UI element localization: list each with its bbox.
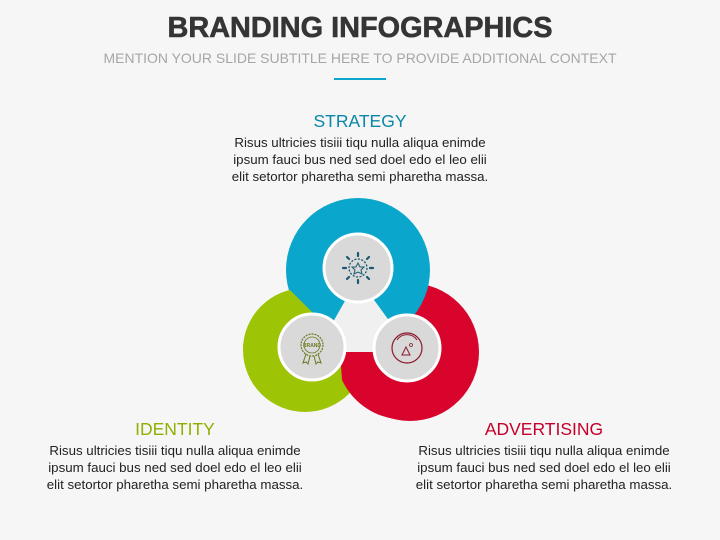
text: strategy: elit setortor pharetha semi pharetha massa. [232,169,488,184]
icon: strategy [324,234,392,302]
text: identity: Risus ultricies tisiii tiqu nulla aliqua enimde [49,443,301,458]
text: strategy: ipsum fauci bus ned sed doel edo el leo elii [233,152,487,167]
text: identity: ipsum fauci bus ned sed doel edo el leo elii [48,460,302,475]
icon: identity brand badge: BRAND [303,343,321,349]
heading: strategy: STRATEGY [313,111,407,131]
green over blue at left [243,290,330,350]
heading: identity: IDENTITY [135,419,215,439]
text: identity [47,443,303,492]
red over green at bottom [340,352,410,419]
title: BRANDING INFOGRAPHICS [168,12,552,44]
text: strategy [232,135,488,184]
text: advertising: elit setortor pharetha semi pharetha massa. [416,477,672,492]
subtitle: MENTION YOUR SLIDE SUBTITLE HERE TO PROVIDE ADDITIONAL CONTEXT [104,50,617,66]
diagram: three rings [243,198,479,421]
center triangle [316,278,412,352]
text: advertising: ipsum fauci bus ned sed doel edo el leo elii [417,460,671,475]
icon: advertising sticker [374,315,440,381]
text: strategy: Risus ultricies tisiii tiqu nulla aliqua enimde [234,135,486,150]
text: advertising [416,443,672,492]
text: advertising: Risus ultricies tisiii tiqu nulla aliqua enimde [418,443,670,458]
text: identity: elit setortor pharetha semi pharetha massa. [47,477,303,492]
heading: advertising: ADVERTISING [485,419,603,439]
icon: identity brand badge [279,314,345,380]
